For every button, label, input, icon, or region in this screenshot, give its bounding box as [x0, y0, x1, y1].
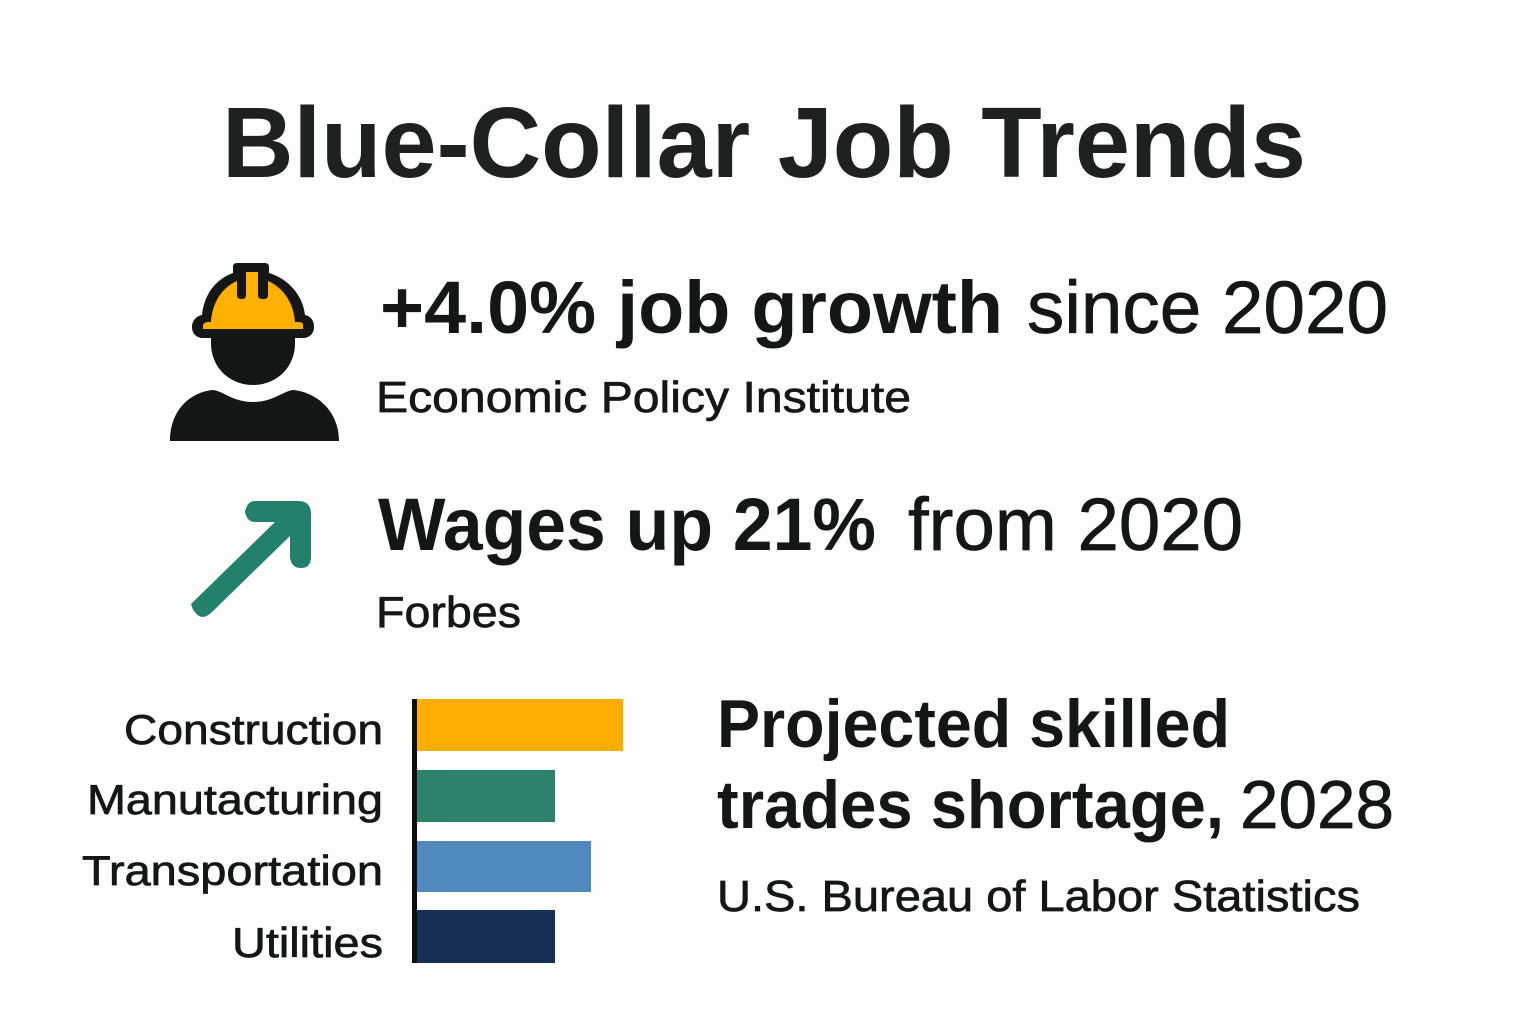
bar: Manufacturing — [417, 770, 555, 822]
job growth figure: +4.0% job growth — [380, 266, 1003, 349]
wages figure: Wages up 21% — [378, 483, 876, 566]
worker head — [211, 325, 295, 385]
shortage source: U.S. Bureau of Labor Statistics — [717, 872, 1360, 921]
title: Blue-Collar Job Trends — [222, 87, 1306, 199]
label: Transportation: Transportation — [82, 847, 383, 894]
label: Utilities: Utilities — [232, 919, 383, 966]
stat: job growth — [376, 266, 1388, 422]
bar: Utilities — [417, 910, 555, 963]
shortage heading line 1: Projected skilled — [717, 686, 1230, 762]
label: Construction: Construction — [124, 706, 383, 753]
helmet outline — [192, 263, 314, 338]
job growth source: Economic Policy Institute — [376, 373, 911, 422]
label: Manufacturing: Manutacturing — [87, 776, 383, 823]
bar: Construction — [417, 699, 623, 751]
job growth period: since 2020 — [1027, 266, 1388, 349]
stat: projected shortage — [717, 686, 1394, 921]
wages period: from 2020 — [908, 483, 1243, 566]
shortage heading line 2: trades shortage, — [717, 767, 1224, 843]
helmet shell — [203, 272, 303, 329]
shortage year: 2028 — [1240, 767, 1394, 843]
stat: wages — [376, 483, 1243, 637]
icon: upward arrow — [191, 501, 311, 617]
bar: Transportation — [417, 841, 591, 892]
icon: construction worker — [170, 263, 339, 441]
bar chart: skilled trades shortage by sector — [82, 699, 623, 966]
worker shoulders — [170, 390, 339, 441]
wages source: Forbes — [376, 588, 521, 637]
chart axis — [412, 699, 417, 963]
